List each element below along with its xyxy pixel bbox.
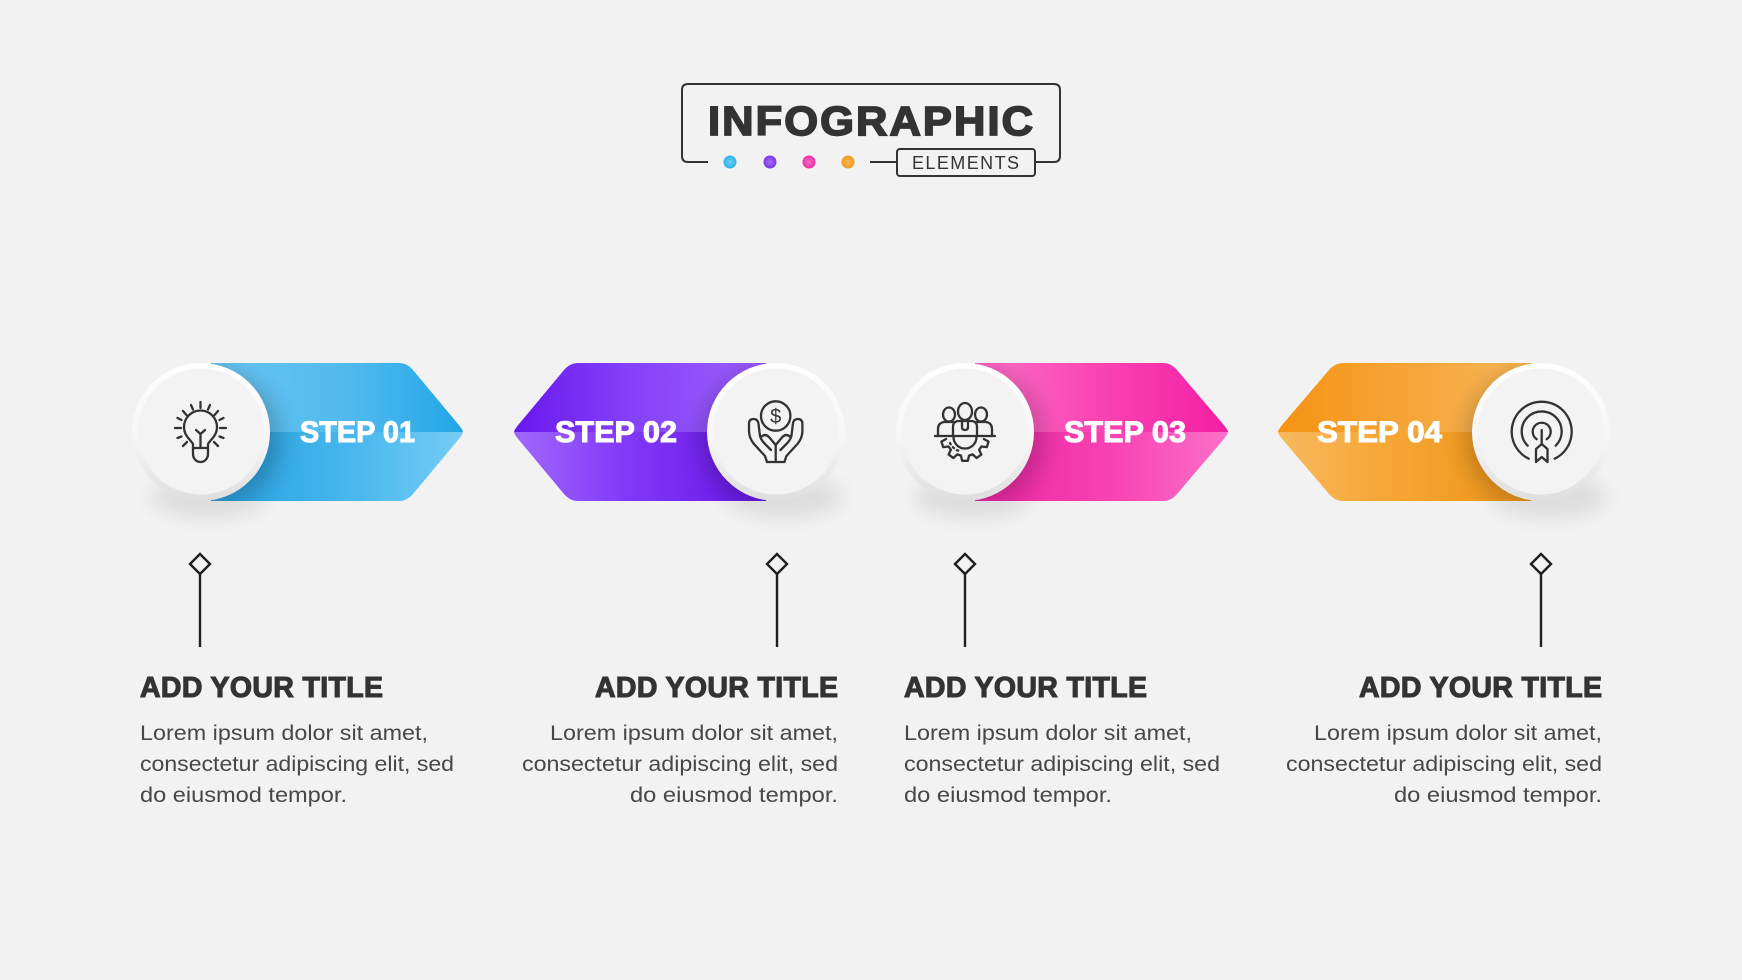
title text: INFOGRAPHIC — [708, 98, 1033, 144]
text block 2: ADD YOUR TITLE — [595, 672, 838, 704]
icon: hands holding coin — [749, 401, 802, 462]
step label: STEP 02 — [555, 416, 677, 449]
text block 4: Lorem ipsum dolor sit amet, — [1314, 722, 1602, 745]
panel: step 01 — [132, 363, 463, 517]
step label: STEP 01 — [300, 416, 415, 449]
elements tag: ELEMENTS — [912, 153, 1019, 173]
ribbon orange — [1278, 363, 1607, 517]
circle badge — [707, 363, 845, 501]
connector 1 — [190, 554, 210, 647]
text block 2: consectetur adipiscing elit, sed — [522, 753, 838, 776]
text block 3: Lorem ipsum dolor sit amet, — [904, 722, 1192, 745]
colored dots — [724, 156, 854, 168]
text block 3: ADD YOUR TITLE — [904, 672, 1147, 704]
icon: team and gear — [935, 403, 995, 461]
step label: STEP 03 — [1064, 416, 1186, 449]
text block 2: do eiusmod tempor. — [630, 784, 838, 807]
connector 3 — [955, 554, 975, 647]
text block 1: do eiusmod tempor. — [140, 784, 347, 807]
ribbon blue — [141, 363, 463, 517]
panel: step 03 — [896, 363, 1228, 517]
text block 4: ADD YOUR TITLE — [1359, 672, 1602, 704]
text block 1: ADD YOUR TITLE — [140, 672, 383, 704]
circle badge — [132, 363, 270, 501]
icon: target arrow — [1512, 402, 1572, 462]
text block 3 — [904, 672, 1220, 807]
icon: light bulb — [175, 402, 226, 462]
panel: step 04 — [1278, 363, 1610, 517]
text block 1: consectetur adipiscing elit, sed — [140, 753, 454, 776]
icon: hands holding coin: $ — [770, 406, 781, 428]
text block 2 — [522, 672, 838, 807]
connector 2 — [767, 554, 787, 647]
connector 4 — [1531, 554, 1551, 647]
text block 4 — [1286, 672, 1602, 807]
text block 4: do eiusmod tempor. — [1394, 784, 1602, 807]
text block 3: consectetur adipiscing elit, sed — [904, 753, 1220, 776]
text block 1: Lorem ipsum dolor sit amet, — [140, 722, 428, 745]
frame outline — [682, 84, 1060, 162]
text block 1 — [140, 672, 454, 807]
circle badge — [1472, 363, 1610, 501]
text block 3: do eiusmod tempor. — [904, 784, 1112, 807]
text block 2: Lorem ipsum dolor sit amet, — [550, 722, 838, 745]
ribbon pink — [905, 363, 1228, 517]
circle badge — [896, 363, 1034, 501]
step label: STEP 04 — [1317, 416, 1443, 449]
elements tag — [897, 149, 1035, 176]
text block 4: consectetur adipiscing elit, sed — [1286, 753, 1602, 776]
title badge — [682, 84, 1060, 176]
panel: step 02 — [514, 363, 845, 517]
ribbon purple — [514, 363, 842, 517]
